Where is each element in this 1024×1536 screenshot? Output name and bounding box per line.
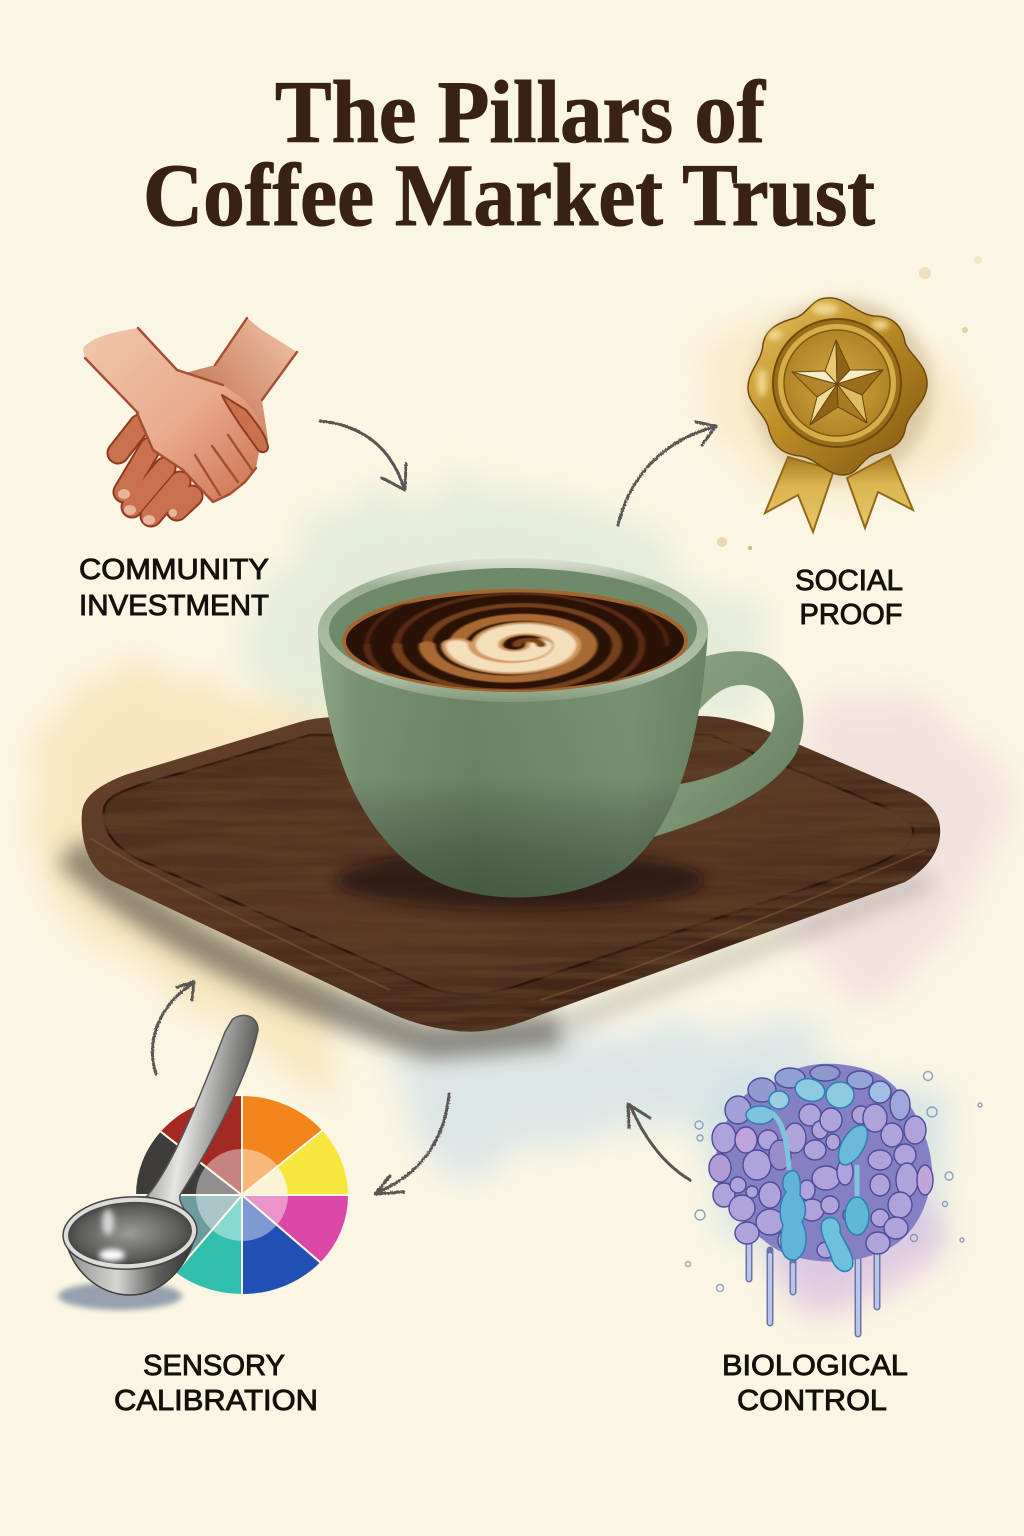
spoon shadow (58, 1282, 182, 1310)
label: social proof: PROOF (800, 599, 902, 631)
colour wheel (135, 1095, 349, 1295)
icon: biological microbe cluster (686, 1064, 982, 1334)
star (792, 340, 883, 425)
coffee cup (318, 558, 803, 897)
icon: clasped hands (83, 318, 297, 525)
drips (749, 1240, 877, 1334)
title: The Pillars of (275, 64, 766, 162)
arrow: biological to cup (628, 1104, 690, 1180)
cup rim (318, 558, 708, 702)
icon: cupping spoon and colour wheel (58, 1015, 349, 1310)
label: community investment (79, 554, 269, 622)
label: community investment: COMMUNITY (79, 554, 269, 586)
label: social proof: SOCIAL (795, 565, 903, 597)
label: biological control: BIOLOGICAL (722, 1350, 908, 1382)
cup handle (650, 651, 803, 838)
tray shadow (70, 850, 930, 1042)
label: biological control (722, 1350, 908, 1417)
spoon handle (147, 1015, 258, 1228)
label: sensory calibration: SENSORY (143, 1350, 285, 1382)
watercolor background washes (32, 256, 1002, 1320)
arrow: sensory to tray (152, 982, 194, 1074)
label: sensory calibration: CALIBRATION (114, 1385, 318, 1417)
arrow: cup to social proof (618, 422, 716, 525)
wooden tray (82, 716, 940, 1032)
cup body (318, 630, 708, 897)
label: biological control: CONTROL (737, 1385, 887, 1417)
cell cluster (715, 1064, 932, 1262)
arrow: community to cup (320, 421, 406, 490)
blue bacilli (746, 1075, 874, 1271)
cup shadow on tray (335, 850, 705, 910)
title (143, 64, 875, 245)
spoon bowl (64, 1232, 196, 1295)
coffee surface with latte swirl (342, 589, 688, 692)
label: community investment: INVESTMENT (79, 590, 269, 622)
label: sensory calibration (114, 1350, 318, 1417)
label: social proof (795, 565, 903, 631)
icon: gold wax seal with star (748, 298, 932, 532)
title: Coffee Market Trust (143, 147, 875, 245)
arrow: cup to sensory (375, 1094, 449, 1194)
